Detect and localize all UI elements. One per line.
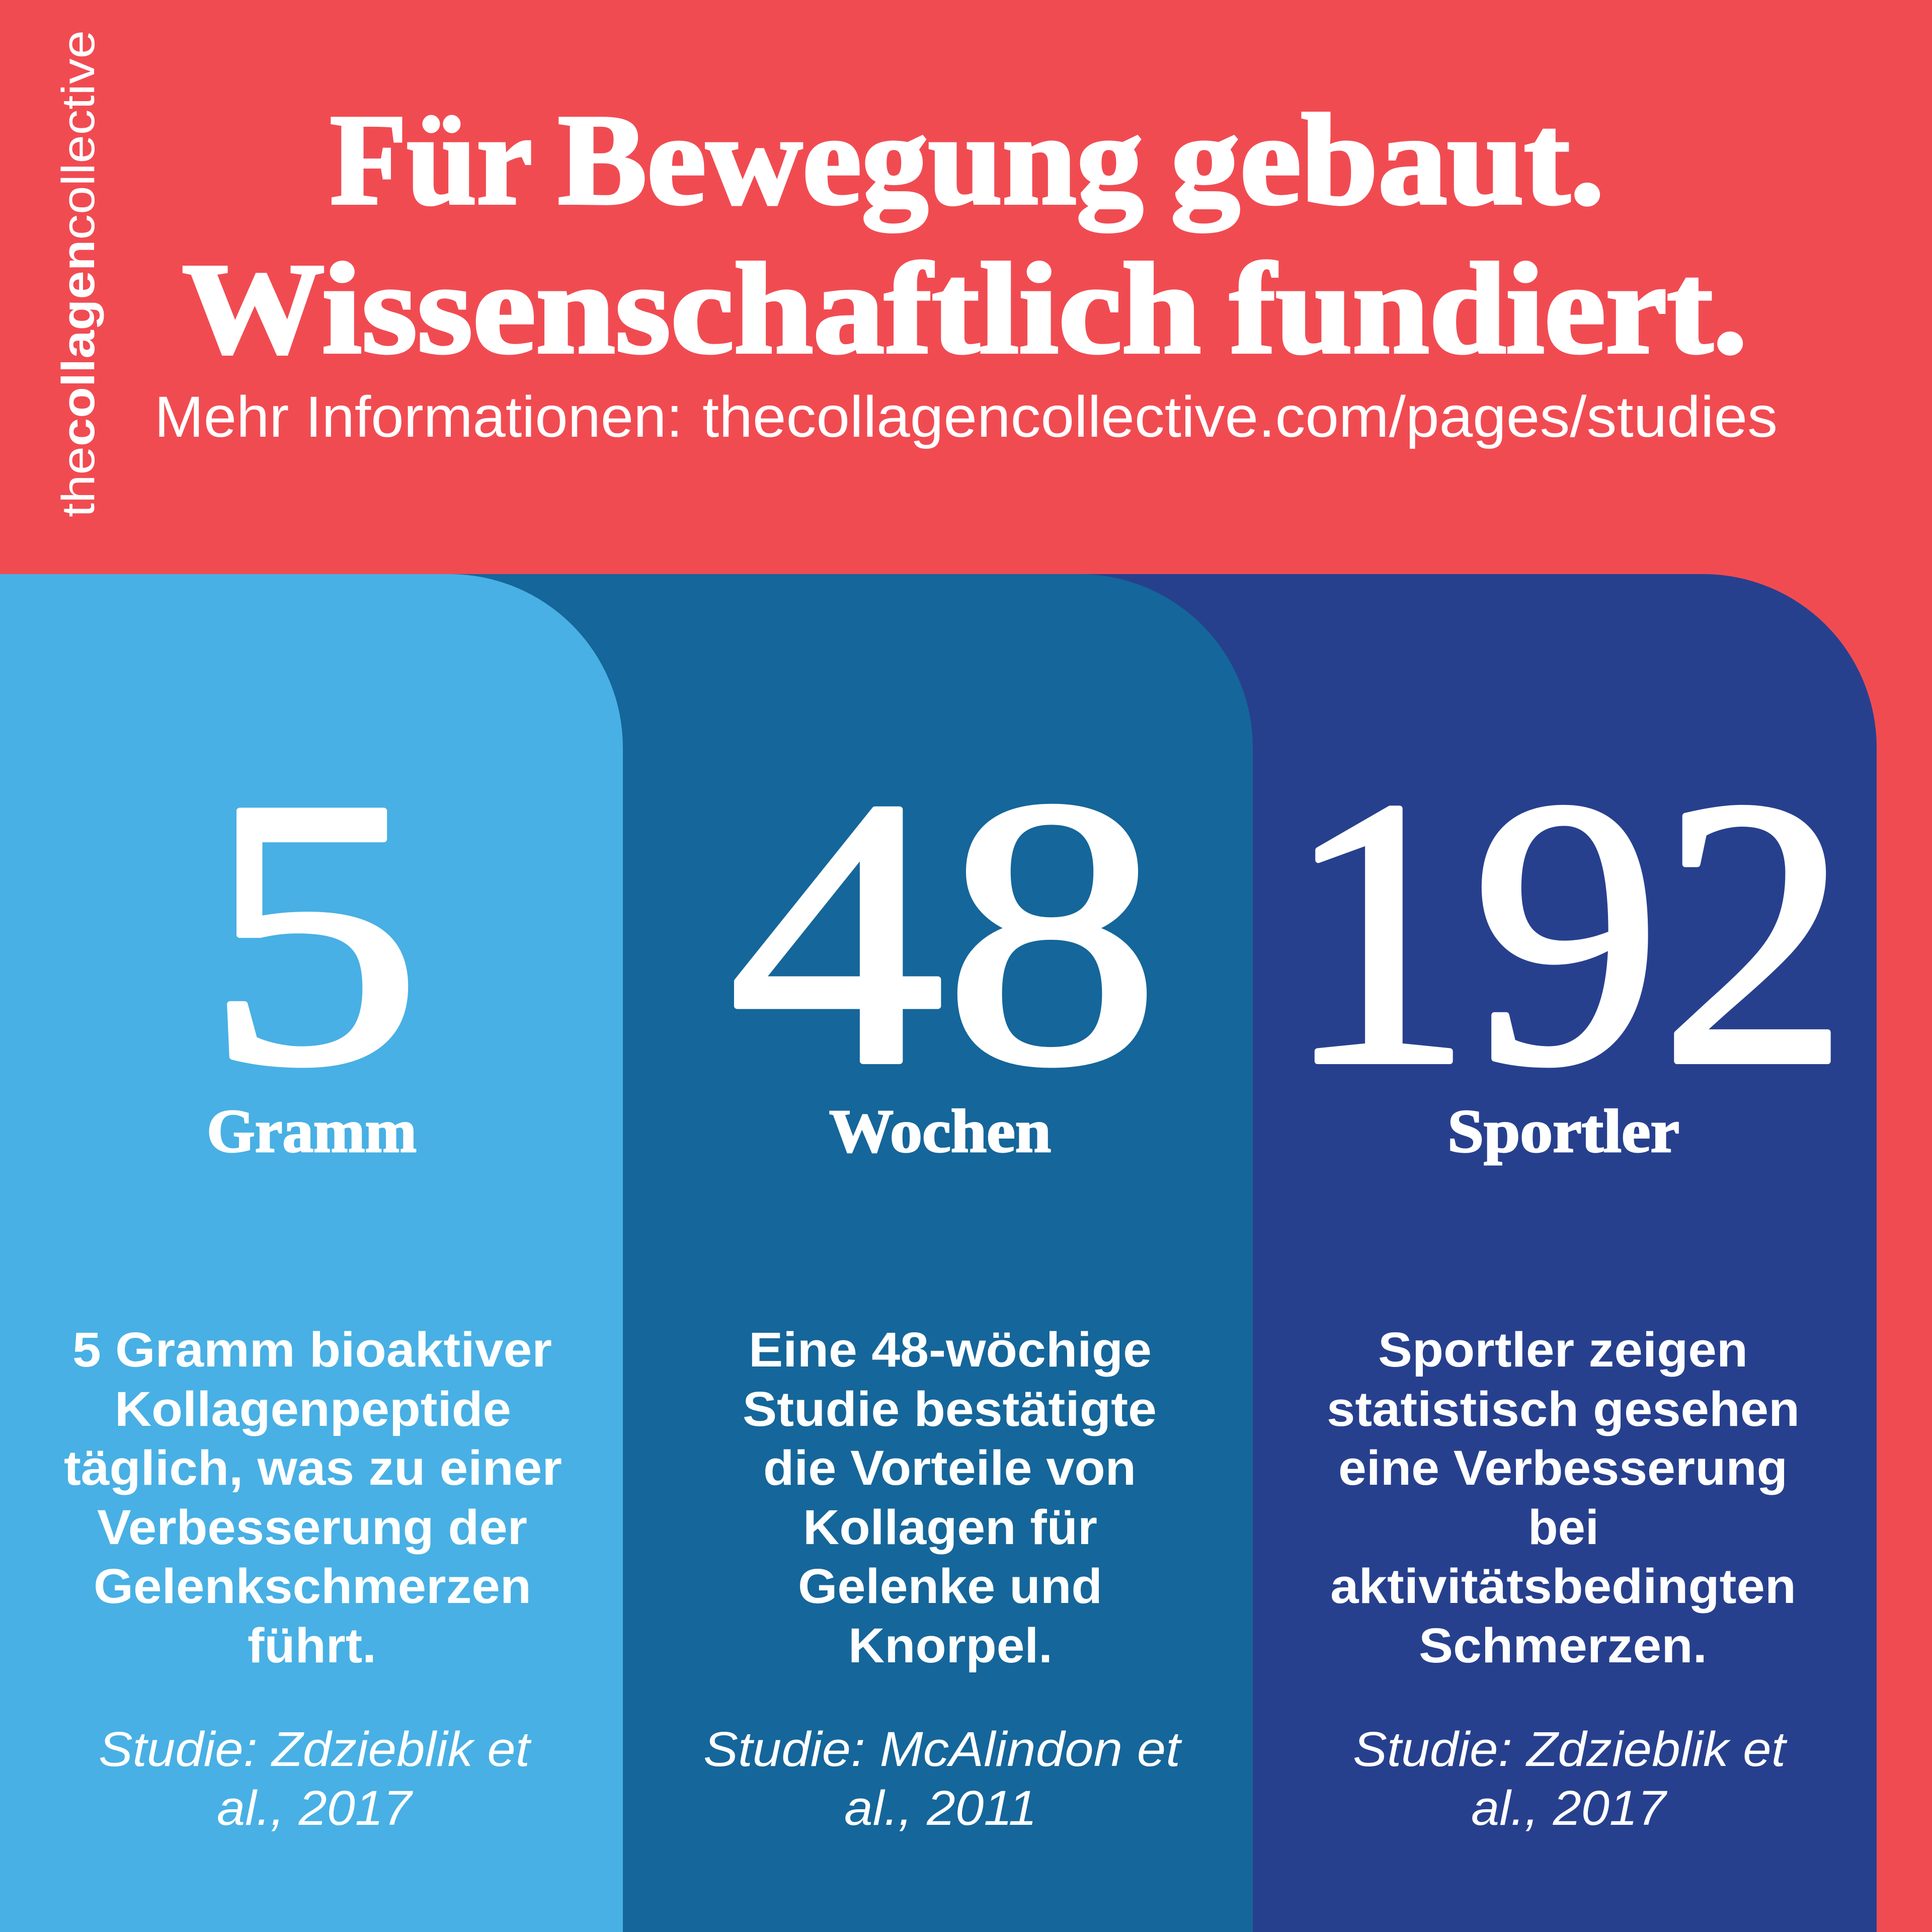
title: gebaut. (1171, 88, 1604, 233)
unit label Sportler: Sportler (1447, 1097, 1679, 1165)
body text: statistisch gesehen (1327, 1382, 1800, 1436)
title: Wissenschaftlich (182, 236, 1201, 380)
unit label Wochen: Wochen (829, 1097, 1051, 1165)
subtitle: link (154, 385, 1778, 449)
big number 48: 48 (729, 721, 1160, 1144)
body text: Gelenkschmerzen (94, 1559, 531, 1614)
big number 5: 5 (205, 721, 422, 1144)
body text: täglich, was zu einer (64, 1440, 562, 1495)
panel: Gramm background (0, 574, 623, 1932)
body text: Studie bestätigte (743, 1382, 1157, 1436)
column: Wochen (703, 721, 1182, 1835)
panel: Wochen background (252, 574, 1253, 1932)
title: fundiert. (1230, 236, 1747, 380)
title: Für (330, 88, 532, 231)
body text: die Vorteile von (763, 1440, 1136, 1495)
column: Sportler (1284, 721, 1848, 1835)
subtitle: link: Mehr Informationen: (154, 385, 683, 449)
body text: bei (1528, 1500, 1599, 1555)
citation (99, 1722, 532, 1835)
citation: al., 2011 (844, 1781, 1037, 1835)
citation: Studie: Zdzieblik et (1353, 1722, 1788, 1777)
body text: eine Verbesserung (1338, 1440, 1788, 1495)
body text: Schmerzen. (1419, 1618, 1707, 1673)
title (182, 88, 1747, 380)
citation: al., 2017 (1471, 1781, 1667, 1835)
panel: Sportler background (403, 574, 1877, 1932)
body text: Eine 48-wöchige (749, 1322, 1152, 1377)
body text: Knorpel. (848, 1618, 1053, 1673)
subtitle: link: thecollagencollective.com/pages/studies (702, 385, 1778, 449)
citation (1353, 1722, 1788, 1835)
citation (703, 1722, 1182, 1835)
body text: führt. (248, 1618, 376, 1673)
body text: 5 Gramm bioaktiver (72, 1322, 552, 1377)
citation: al., 2017 (217, 1781, 413, 1835)
unit label Gramm: Gramm (207, 1097, 417, 1165)
title: Bewegung (558, 88, 1143, 233)
column: Gramm (64, 721, 562, 1835)
body text: Gelenke und (798, 1559, 1102, 1614)
citation: Studie: McAlindon et (703, 1722, 1182, 1777)
body text: Sportler zeigen (1378, 1322, 1748, 1377)
body text: Kollagen für (803, 1500, 1097, 1555)
body text (64, 1322, 562, 1673)
logo: thecollagencollective: thecollagencollective (53, 30, 104, 517)
citation: Studie: Zdzieblik et (99, 1722, 532, 1777)
body text (1327, 1322, 1800, 1673)
body text: aktivitätsbedingten (1330, 1559, 1796, 1614)
body text: Verbesserung der (97, 1500, 527, 1555)
big number 192: 192 (1284, 721, 1848, 1144)
body text: Kollagenpeptide (115, 1382, 511, 1436)
body text (743, 1322, 1157, 1673)
